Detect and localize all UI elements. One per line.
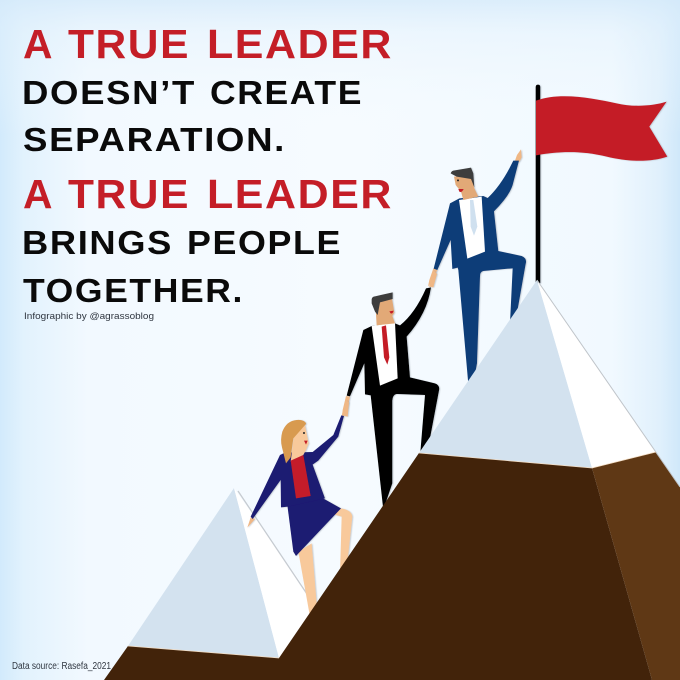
navy skirt	[287, 497, 341, 556]
heading: a true leader second: LEADER	[207, 171, 393, 217]
head	[375, 299, 395, 325]
navy jacket	[251, 415, 344, 519]
raised hand	[515, 149, 522, 162]
heading: a true leader second	[23, 171, 393, 217]
red flag	[536, 96, 667, 161]
brown rock front face	[104, 453, 652, 680]
hair	[451, 168, 474, 187]
heading: a true leader second: A	[23, 171, 54, 217]
red tie	[382, 325, 389, 365]
text: doesn't create: DOESN’T	[22, 75, 196, 112]
small mountain snow cap	[128, 488, 316, 658]
front leg	[298, 543, 317, 617]
text: brings people: BRINGS	[22, 225, 173, 262]
figure: woman in navy suit	[247, 400, 352, 617]
hair	[372, 292, 393, 315]
text: separation: SEPARATION.	[23, 122, 286, 159]
heading: a true leader: TRUE	[68, 21, 190, 67]
heading: a true leader second: TRUE	[68, 171, 190, 217]
big mountain	[104, 280, 680, 680]
text: brings people	[22, 225, 342, 262]
brown rock side face	[592, 452, 680, 680]
text: doesn't create: CREATE	[210, 75, 363, 112]
heading: a true leader: LEADER	[207, 21, 393, 67]
credit: Infographic by @agrassoblog	[24, 311, 154, 322]
figure: man in blue suit	[428, 149, 526, 403]
figure: man in black suit	[342, 270, 439, 510]
rear leg	[330, 508, 352, 573]
raised hand	[429, 270, 437, 287]
lower hand	[247, 517, 255, 528]
heading: a true leader: A	[23, 21, 54, 67]
text: doesn't create	[22, 75, 363, 112]
black suit	[347, 287, 439, 510]
lower hand	[342, 396, 350, 416]
data source: Data source: Rasefa_2021	[12, 661, 111, 672]
title text block	[22, 21, 393, 310]
hair	[281, 420, 306, 463]
bright snow cap	[537, 280, 656, 468]
heading: a true leader	[23, 21, 393, 67]
head	[454, 176, 478, 200]
flag on pole	[536, 85, 667, 283]
flag pole	[536, 85, 540, 283]
text: brings people: PEOPLE	[187, 225, 342, 262]
shaded snow cap	[419, 280, 592, 468]
blue suit	[434, 161, 526, 403]
face	[291, 425, 309, 462]
lower hand	[428, 268, 437, 287]
raised hand	[342, 400, 349, 417]
white shirt	[372, 323, 398, 386]
white shirt	[459, 197, 485, 259]
text: together: TOGETHER.	[23, 273, 244, 310]
red top	[291, 455, 311, 498]
tie	[470, 200, 477, 236]
